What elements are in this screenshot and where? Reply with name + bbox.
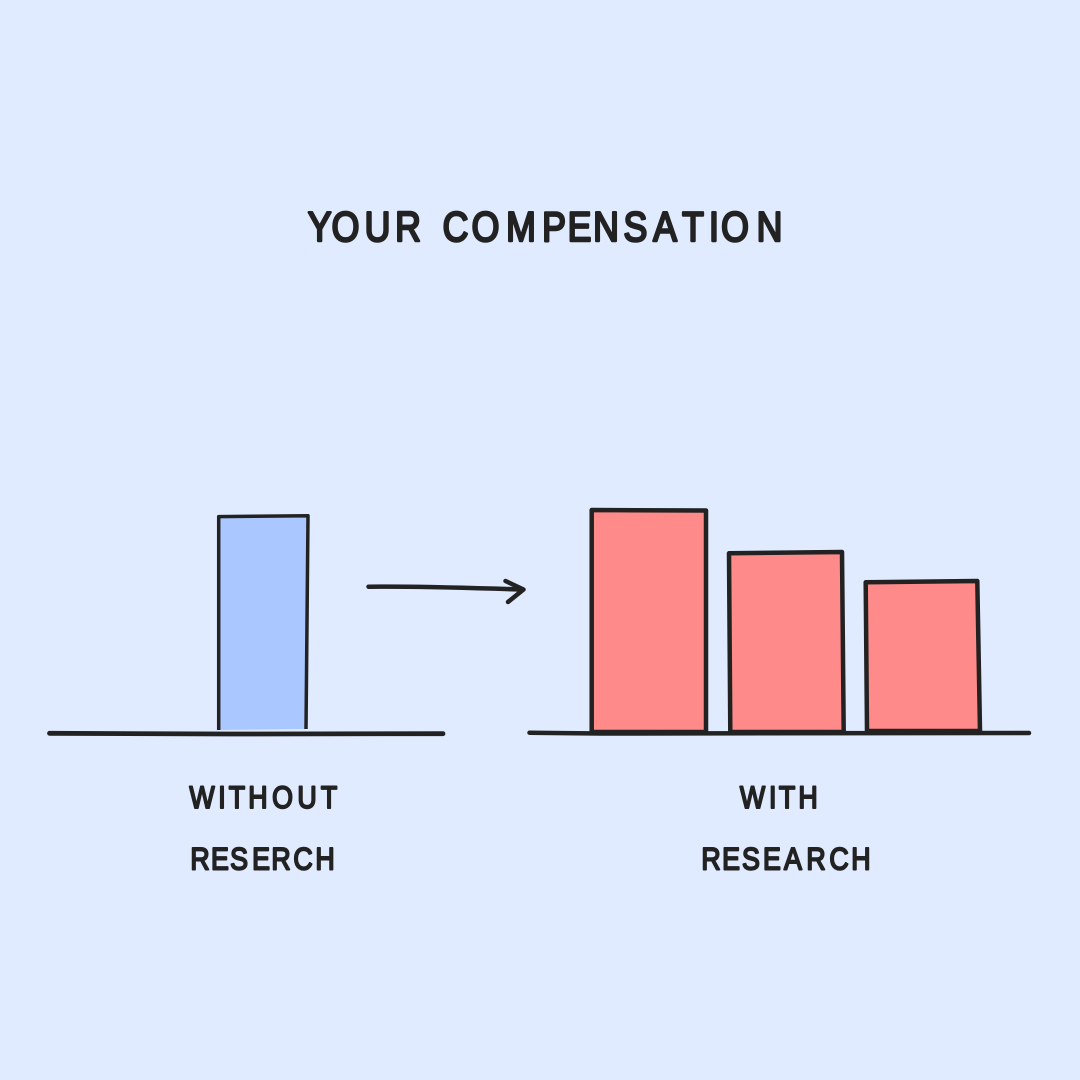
chart: with research <box>530 510 1029 734</box>
bar: income source 3, red <box>866 581 980 731</box>
arrow <box>368 581 524 602</box>
title: YOUR COMPENSATION <box>308 204 782 251</box>
label: without reserch: RESERCH <box>190 843 335 877</box>
chart: without research <box>50 516 443 734</box>
label: without reserch: WITHOUT <box>189 781 337 816</box>
label: with research <box>701 781 871 877</box>
bar: single income, blue <box>219 516 308 730</box>
label: without reserch <box>189 781 337 877</box>
baseline: left <box>50 731 443 736</box>
baseline: right <box>530 730 1029 736</box>
label: with research: WITH <box>740 781 818 816</box>
label: with research: RESEARCH <box>701 843 871 877</box>
bar: income source 1, red <box>592 510 706 732</box>
bar: income source 2, red <box>729 552 844 732</box>
